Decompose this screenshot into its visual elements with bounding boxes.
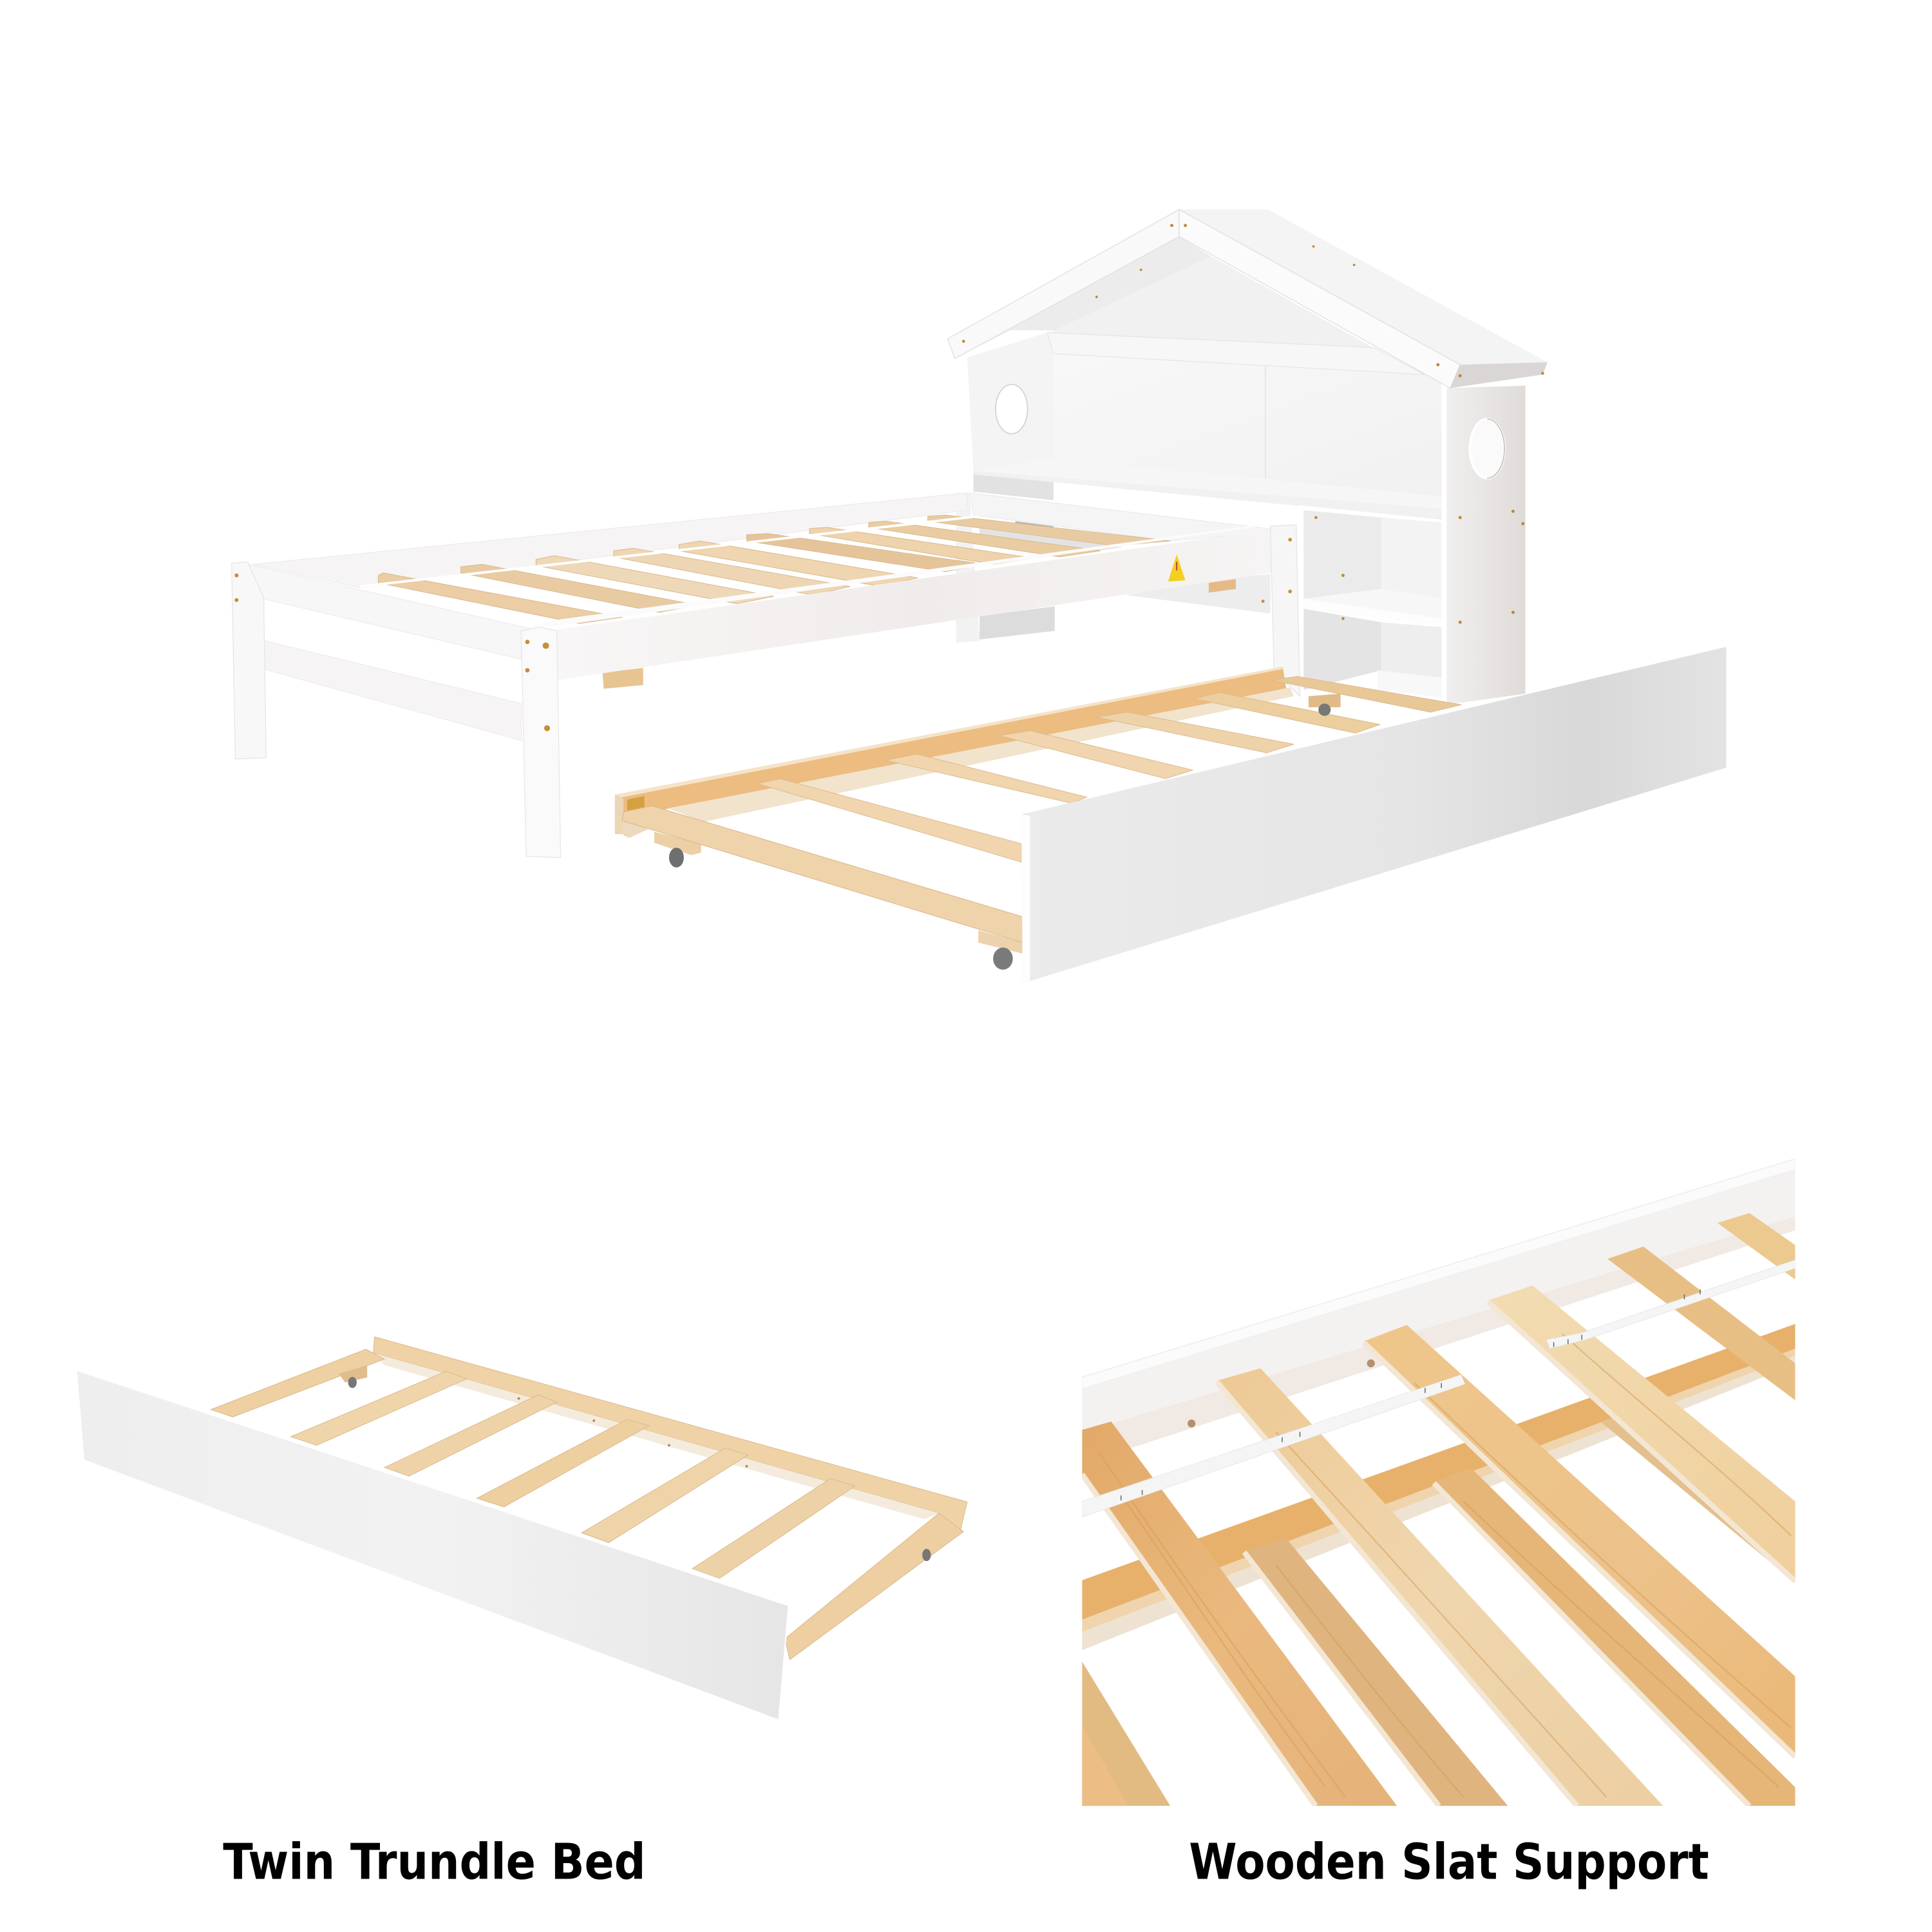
end support under front rail (623, 819, 648, 838)
roof (947, 209, 1548, 388)
foot-left leg (232, 562, 266, 759)
lower foot rail (250, 637, 521, 741)
slat webbing strap (360, 516, 978, 587)
trundle inner rail (668, 688, 1294, 822)
trundle bed pulled out (615, 647, 1726, 983)
detail image: twin trundle bed (77, 1337, 967, 1720)
rear leg and block (956, 493, 1055, 643)
rail holes (518, 1397, 824, 1487)
lower bookshelf unit (1299, 505, 1444, 700)
trundle inner rail (374, 1353, 939, 1519)
plain white left panel edge (1021, 815, 1030, 983)
rail top edge (530, 525, 1271, 627)
hinge (627, 796, 645, 811)
trundle casters (654, 694, 1341, 970)
head-end post (1271, 525, 1300, 696)
white bed rail (1082, 1159, 1795, 1450)
headboard screws (962, 224, 1544, 624)
wood support blocks (603, 579, 1236, 689)
long side rail (557, 529, 1278, 680)
bed slats (378, 515, 1171, 623)
trundle front rail (622, 806, 1023, 943)
gable back wall (1054, 256, 1419, 374)
caption: wooden slat support: Wooden Slat Support (1189, 1834, 1709, 1891)
foot-right leg (521, 627, 561, 858)
slat plywood edges (1082, 1302, 1795, 1806)
block under shelf (973, 473, 1054, 500)
casters (339, 1365, 931, 1561)
trundle front panel (1021, 647, 1726, 983)
trundle back rail (374, 1337, 967, 1533)
upper shelf (973, 459, 1444, 520)
wood support beam (1082, 1324, 1795, 1650)
upper foot rail (248, 564, 530, 659)
lower slats (1082, 1413, 1795, 1806)
detail image: wooden slat support (1082, 1159, 1795, 1806)
right tower side (1444, 377, 1526, 705)
strap stitch marks (1121, 1289, 1700, 1501)
bed frame (232, 493, 1300, 858)
left side panel with round window (967, 330, 1055, 473)
house bookcase headboard (947, 209, 1548, 705)
trundle front panel (77, 1370, 788, 1720)
trundle slats (758, 676, 1461, 862)
far side rail (252, 493, 967, 588)
main image: twin bed with house headboard and trundle (232, 209, 1726, 983)
webbing straps (1082, 1260, 1795, 1517)
main long slats (1082, 1213, 1795, 1806)
back panel (1054, 354, 1448, 499)
head-end rail (970, 493, 1278, 614)
wood grain (1099, 1334, 1792, 1797)
trundle slats (211, 1349, 963, 1660)
frame screws (234, 538, 1292, 731)
caption: twin trundle bed: Twin Trundle Bed (223, 1834, 646, 1891)
trundle plywood back rail (615, 667, 1286, 834)
warning sticker (1168, 554, 1186, 582)
header bar (1047, 333, 1425, 375)
